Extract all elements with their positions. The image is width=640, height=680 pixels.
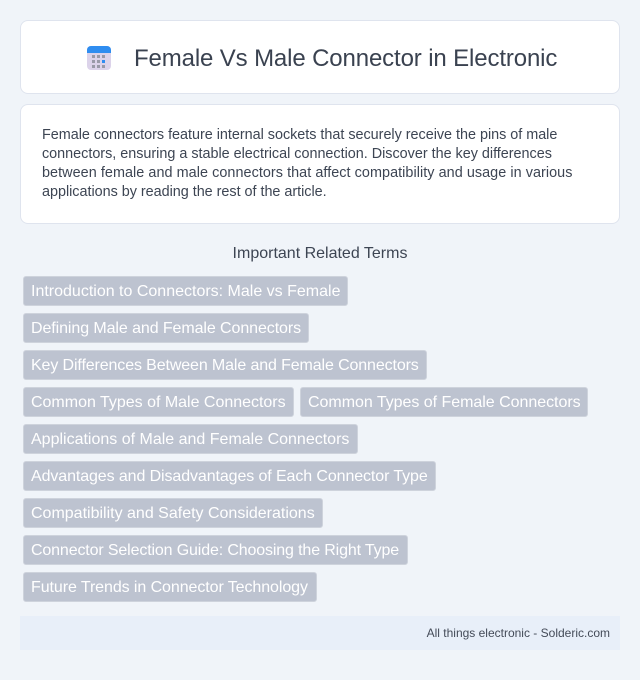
tag: selection guide: Connector Selection Guide: Choosing the Right Type [31, 542, 399, 559]
tag: female types [300, 387, 588, 417]
tag: advantages: Advantages and Disadvantages of Each Connector Type [31, 468, 428, 485]
intro paragraph: Female connectors feature internal sockets that securely receive the pins of male [42, 127, 557, 143]
tag: key differences: Key Differences Between Male and Female Connectors [31, 357, 419, 374]
tag: applications: Applications of Male and Female Connectors [31, 431, 349, 448]
tag: compatibility [23, 498, 323, 528]
intro text panel [20, 104, 620, 224]
tag: male types [23, 387, 294, 417]
tag: introduction: Introduction to Connectors: Male vs Female [31, 283, 340, 300]
footer [20, 616, 620, 650]
tag: advantages [23, 461, 436, 491]
intro paragraph: connectors, ensuring a stable electrical connection. Discover the key differences [42, 146, 552, 162]
intro paragraph: applications by reading the rest of the article. [42, 184, 327, 200]
intro paragraph: between female and male connectors that affect compatibility and usage in various [42, 165, 572, 181]
tag: key differences [23, 350, 427, 380]
icon: calendar [87, 46, 111, 70]
title: Female Vs Male Connector in Electronic [134, 45, 557, 72]
header panel [20, 20, 620, 94]
tag: selection guide [23, 535, 408, 565]
tag: introduction [23, 276, 348, 306]
tag: female types: Common Types of Female Connectors [308, 394, 581, 411]
intro paragraph [42, 127, 572, 200]
tag: compatibility: Compatibility and Safety Considerations [31, 505, 315, 522]
tag: future trends [23, 572, 317, 602]
tag: future trends: Future Trends in Connector Technology [31, 579, 308, 596]
tag: male types: Common Types of Male Connectors [31, 394, 286, 411]
tag: applications [23, 424, 358, 454]
tag: defining: Defining Male and Female Connectors [31, 320, 301, 337]
term tags [23, 276, 588, 602]
footer credit: All things electronic - Solderic.com [427, 626, 610, 640]
section heading: Important Related Terms [233, 245, 407, 262]
tag: defining [23, 313, 309, 343]
